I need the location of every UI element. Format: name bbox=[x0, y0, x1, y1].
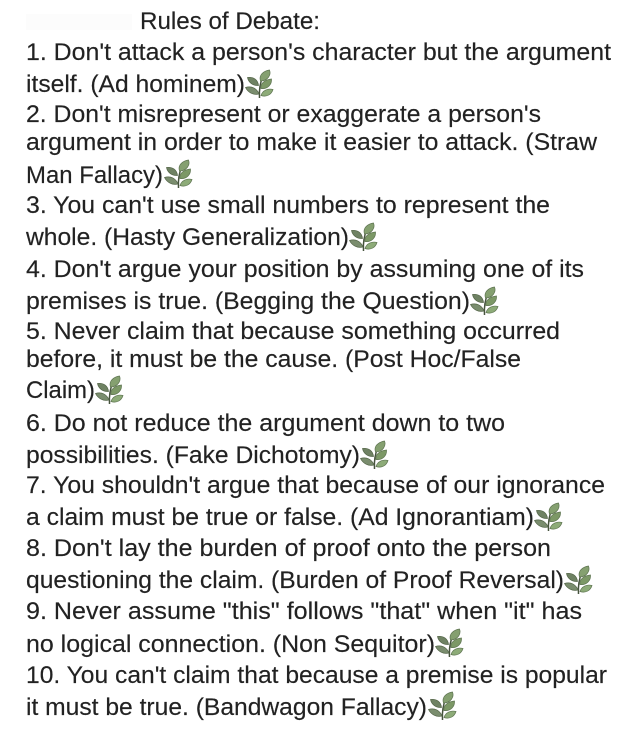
rule 7: 7. You shouldn't argue that because of our ignorance bbox=[26, 472, 605, 499]
rule 4: premises is true. (Begging the Question) bbox=[26, 288, 470, 315]
rule 9 bbox=[26, 598, 582, 658]
rule 9: no logical connection. (Non Sequitor) bbox=[26, 631, 435, 658]
rule 8: 8. Don't lay the burden of proof onto the person bbox=[26, 535, 551, 562]
obscured username smudge bbox=[26, 14, 132, 30]
rule 4: 4. Don't argue your position by assuming one of its bbox=[26, 256, 584, 283]
rule 7: a claim must be true or false. (Ad Ignorantiam) bbox=[26, 504, 534, 531]
title: Rules of Debate: bbox=[140, 8, 320, 35]
rule 1: itself. (Ad hominem) bbox=[26, 71, 245, 98]
rule 10: 10. You can't claim that because a premise is popular bbox=[26, 662, 607, 689]
rule 5: Claim) bbox=[26, 377, 95, 404]
rule 5 bbox=[26, 318, 560, 404]
rule 10: it must be true. (Bandwagon Fallacy) bbox=[26, 694, 427, 721]
rule 9: 9. Never assume "this" follows "that" when "it" has bbox=[26, 598, 582, 625]
rule 6: possibilities. (Fake Dichotomy) bbox=[26, 442, 360, 469]
rule 7 bbox=[26, 472, 605, 531]
rule 2: argument in order to make it easier to attack. (Straw bbox=[26, 129, 598, 156]
rule 2 bbox=[26, 101, 598, 189]
rule 6: 6. Do not reduce the argument down to two bbox=[26, 410, 505, 437]
rule 3: 3. You can't use small numbers to represent the bbox=[26, 192, 550, 219]
rule 8: questioning the claim. (Burden of Proof Reversal) bbox=[26, 567, 564, 594]
rule 3 bbox=[25, 192, 550, 251]
rule 4 bbox=[26, 256, 584, 315]
rule 3: whole. (Hasty Generalization) bbox=[25, 224, 349, 251]
rule 8 bbox=[26, 535, 592, 594]
rule 2: 2. Don't misrepresent or exaggerate a person's bbox=[26, 101, 541, 128]
rule 1 bbox=[26, 39, 611, 98]
rule 2: Man Fallacy) bbox=[26, 162, 163, 189]
rule 6 bbox=[26, 410, 505, 469]
rule 1: 1. Don't attack a person's character but the argument bbox=[26, 39, 611, 66]
rule 5: before, it must be the cause. (Post Hoc/False bbox=[26, 346, 521, 373]
rule 5: 5. Never claim that because something occurred bbox=[26, 318, 560, 345]
rule 10 bbox=[26, 662, 607, 721]
